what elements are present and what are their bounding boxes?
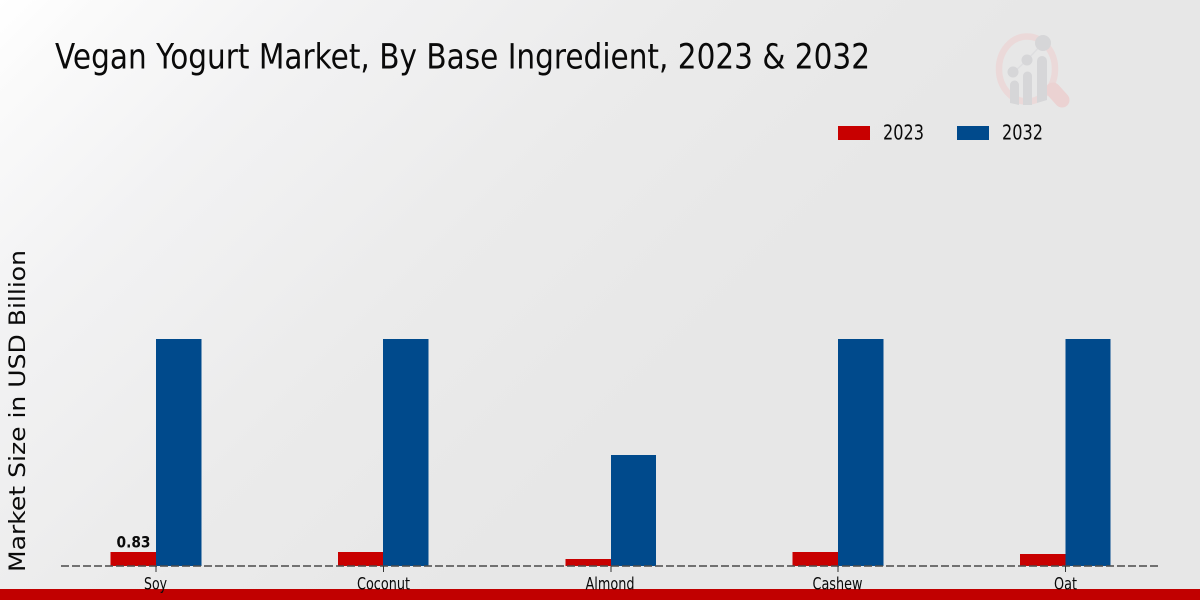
- data label: Soy 2023: 0.83: [116, 532, 150, 552]
- bar group: Soy: [110, 339, 202, 566]
- legend: [838, 120, 1043, 144]
- title: Vegan Yogurt Market, By Base Ingredient, 2023 & 2032: [55, 38, 870, 78]
- bar chart: [61, 339, 1160, 572]
- x axis labels: Almond: [586, 574, 634, 594]
- x axis labels: Oat: [1054, 574, 1077, 594]
- legend item: 2032: [957, 120, 1043, 144]
- legend item: 2032: 2032: [1002, 120, 1043, 144]
- icon: watermark magnifier logo: [999, 35, 1062, 105]
- legend item: 2023: [838, 120, 924, 144]
- x axis labels: Soy: [144, 574, 167, 594]
- dashed baseline: [61, 565, 1160, 567]
- bar group: Oat: [1020, 339, 1110, 566]
- footer band: [0, 589, 1200, 600]
- bar group: Almond: [566, 455, 656, 566]
- bar group: Coconut: [338, 339, 428, 566]
- x axis labels: [144, 574, 1077, 594]
- x axis labels: Coconut: [357, 574, 410, 594]
- tick marks: [156, 566, 1066, 572]
- x axis labels: Cashew: [812, 574, 862, 594]
- legend item: 2023: 2023: [883, 120, 924, 144]
- y axis label: Market Size in USD Billion: [5, 250, 31, 572]
- bar group: Cashew: [792, 339, 884, 566]
